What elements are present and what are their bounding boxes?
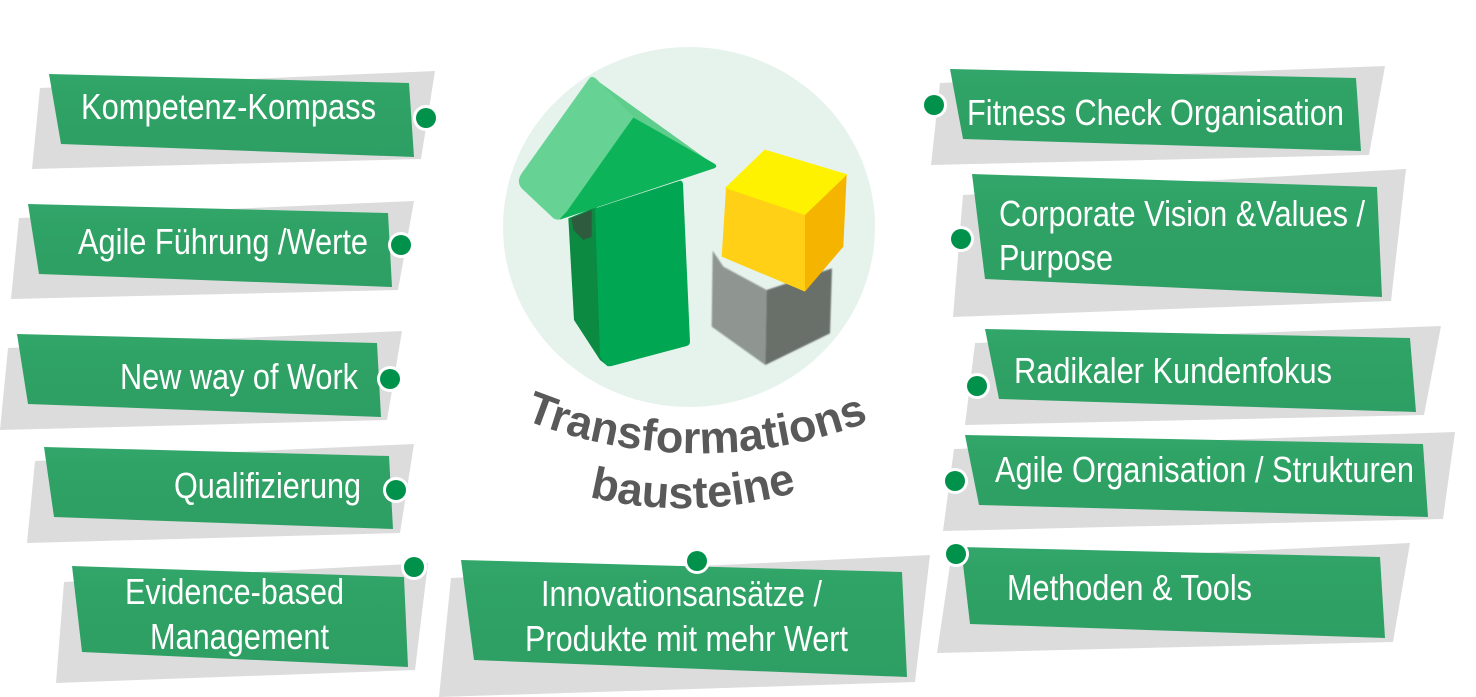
panel: Fitness Check Organisation — [921, 66, 1385, 165]
title — [534, 390, 866, 509]
panel: New way of Work: New way of Work — [120, 356, 359, 397]
panel: Agile Organisation / Strukturen — [942, 432, 1455, 531]
title line 2: bausteine — [592, 466, 794, 509]
background circle — [503, 47, 875, 407]
panel: Innovationsansätze / Produkte mit mehr Wert — [439, 548, 930, 697]
panel: Methoden & Tools — [937, 541, 1410, 653]
panel: New way of Work — [0, 331, 403, 430]
title line 1: Transformations — [534, 390, 866, 454]
panel: Qualifizierung: Qualifizierung — [174, 465, 361, 506]
grey block — [712, 251, 832, 365]
panel: Innovationsansätze / Produkte mit mehr Wert: Produkte mit mehr Wert — [525, 618, 848, 659]
panel: Innovationsansätze / Produkte mit mehr Wert: Innovationsansätze / — [541, 573, 822, 614]
panel: Kompetenz-Kompass: Kompetenz-Kompass — [81, 86, 376, 127]
panel: Agile Organisation / Strukturen: Agile Organisation / Strukturen — [995, 449, 1414, 490]
panel: Methoden & Tools: Methoden & Tools — [1007, 567, 1252, 608]
yellow block — [722, 151, 847, 292]
panel: Corporate Vision & Values / Purpose — [948, 169, 1406, 317]
panel: Evidence-based Management: Evidence-based — [125, 571, 344, 612]
panel: Evidence-based Management: Management — [150, 616, 329, 657]
panel: Fitness Check Organisation: Fitness Check Organisation — [967, 92, 1344, 133]
icon: building blocks — [519, 77, 847, 367]
panel: Evidence-based Management — [56, 554, 428, 683]
panel: Corporate Vision & Values / Purpose: Purpose — [999, 237, 1113, 278]
panel: Kompetenz-Kompass — [32, 71, 439, 169]
panel: Agile Führung /Werte — [11, 201, 414, 299]
panel: Qualifizierung — [27, 444, 414, 543]
green roof block — [519, 77, 716, 220]
panel: Radikaler Kundenfokus: Radikaler Kundenfokus — [1014, 350, 1332, 391]
green tall block — [568, 181, 690, 367]
panel: Corporate Vision & Values / Purpose: Corporate Vision &Values / — [999, 193, 1365, 234]
panel: Agile Führung /Werte: Agile Führung /Werte — [78, 221, 368, 262]
panel: Radikaler Kundenfokus — [964, 326, 1441, 425]
